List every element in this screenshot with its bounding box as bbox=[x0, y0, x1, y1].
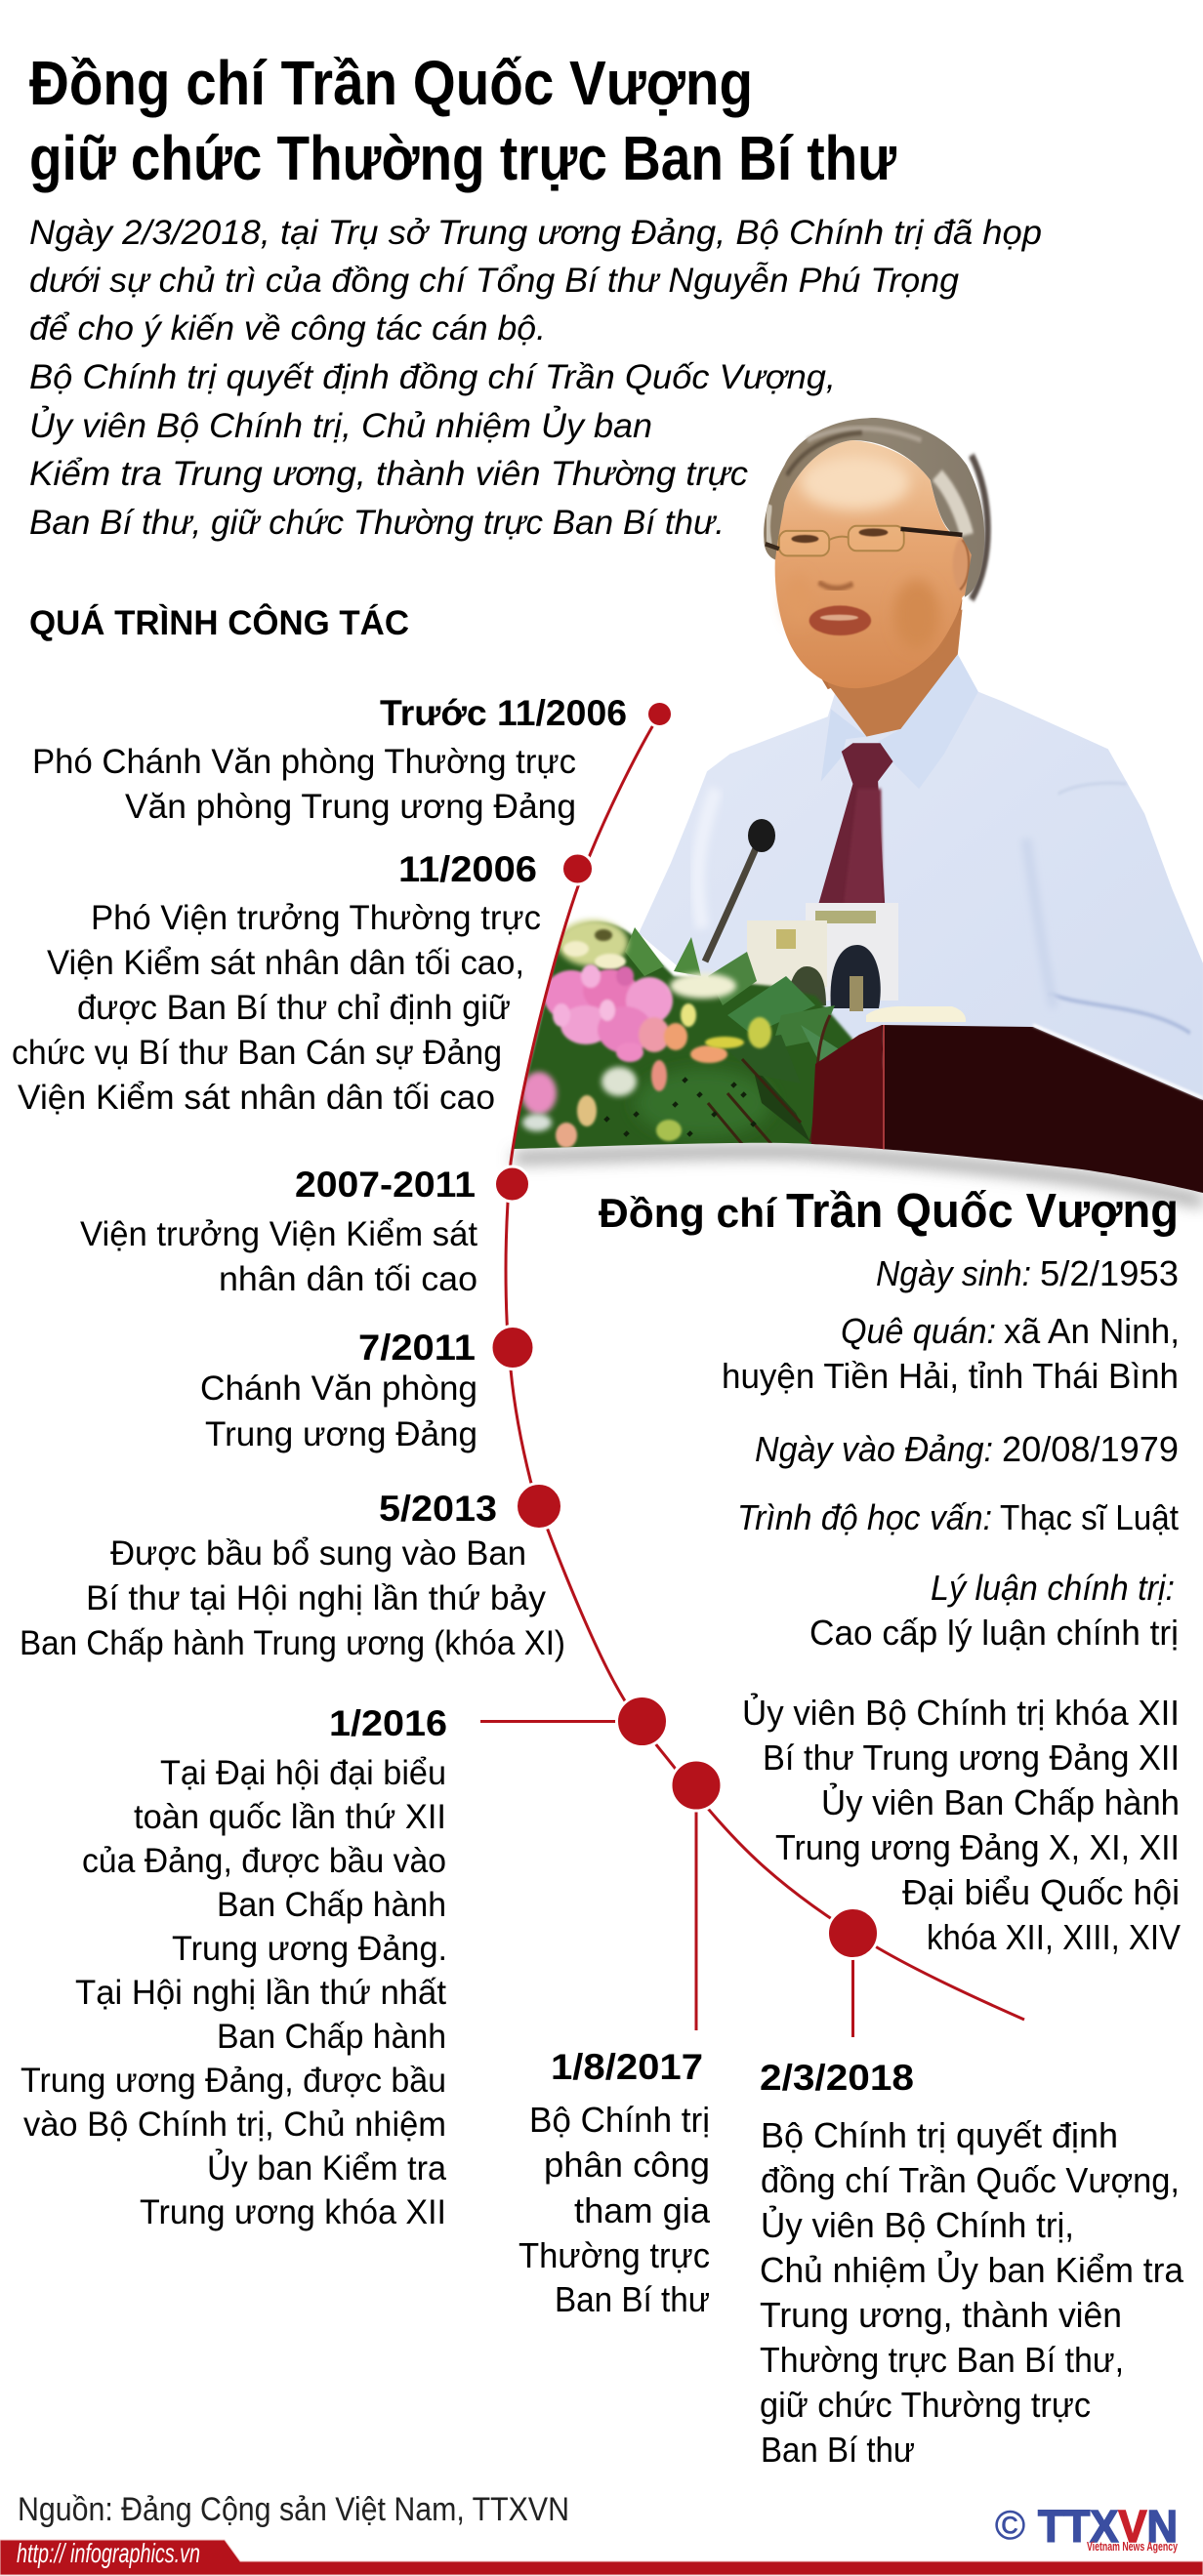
timeline entry: 1/2016: Trung ương Đảng, được bầu bbox=[21, 2062, 446, 2100]
profile details: Ngày vào Đảng: bbox=[755, 1429, 993, 1469]
profile positions bbox=[742, 1692, 1181, 1957]
timeline entry: 2/3/2018: Trung ương, thành viên bbox=[760, 2295, 1122, 2335]
pink orchids bbox=[544, 964, 673, 1062]
title bbox=[29, 48, 897, 193]
podium bbox=[810, 1006, 1203, 1210]
photo: portrait at the podium bbox=[508, 418, 1203, 1210]
timeline entry: 2007-2011 bbox=[80, 1165, 477, 1298]
source: Nguồn: Đảng Cộng sản Việt Nam, TTXVN bbox=[18, 2491, 569, 2528]
timeline entry: 11/2006: Viện Kiểm sát nhân dân tối cao, bbox=[47, 944, 524, 982]
timeline entry: 11/2006: 11/2006 bbox=[398, 849, 537, 889]
profile positions: khóa XII, XIII, XIV bbox=[927, 1917, 1181, 1957]
profile positions: Bí thư Trung ương Đảng XII bbox=[763, 1738, 1180, 1778]
timeline entry: 11/2006: được Ban Bí thư chỉ định giữ bbox=[77, 989, 511, 1027]
timeline entry: 7/2011: 7/2011 bbox=[358, 1328, 476, 1368]
standing microphone bbox=[705, 819, 775, 961]
timeline entry: Trước 11/2006: Văn phòng Trung ương Đảng bbox=[125, 788, 576, 826]
profile details bbox=[722, 1253, 1180, 1653]
timeline dots bbox=[491, 701, 879, 1958]
timeline entry: 7/2011: Trung ương Đảng bbox=[205, 1415, 477, 1453]
profile details: Cao cấp lý luận chính trị bbox=[809, 1613, 1179, 1653]
timeline entry: 2/3/2018: Chủ nhiệm Ủy ban Kiểm tra bbox=[760, 2249, 1184, 2290]
timeline entry: Trước 11/2006 bbox=[32, 693, 627, 826]
timeline entry: 1/8/2017: Ban Bí thư bbox=[555, 2279, 710, 2319]
intro text: Ủy viên Bộ Chính trị, Chủ nhiệm Ủy ban bbox=[29, 405, 652, 445]
timeline entry: 1/2016: vào Bộ Chính trị, Chủ nhiệm bbox=[23, 2106, 446, 2144]
timeline entry: 1/2016: Ban Chấp hành bbox=[217, 2018, 446, 2056]
profile details: Trình độ học vấn: bbox=[737, 1497, 992, 1537]
timeline entry: 5/2013: Ban Chấp hành Trung ương (khóa XI) bbox=[20, 1624, 565, 1662]
profile name heading: Đồng chí bbox=[599, 1190, 777, 1236]
timeline entry: 1/8/2017: 1/8/2017 bbox=[551, 2047, 703, 2087]
timeline entry: 1/2016: Trung ương Đảng. bbox=[172, 1930, 447, 1968]
timeline entry: 1/2016: 1/2016 bbox=[329, 1703, 447, 1743]
timeline entry: 1/2016: Tại Hội nghị lần thứ nhất bbox=[75, 1974, 446, 2012]
intro text: Kiểm tra Trung ương, thành viên Thường trực bbox=[29, 455, 749, 493]
timeline entry: 1/2016: toàn quốc lần thứ XII bbox=[134, 1798, 446, 1836]
section heading: QUÁ TRÌNH CÔNG TÁC bbox=[29, 603, 409, 642]
timeline entry: 5/2013 bbox=[20, 1489, 565, 1662]
timeline entry: 2/3/2018 bbox=[760, 2058, 1184, 2470]
profile details: huyện Tiền Hải, tỉnh Thái Bình bbox=[722, 1356, 1179, 1396]
flower arrangement bbox=[508, 920, 874, 1157]
timeline entry: Trước 11/2006: Phó Chánh Văn phòng Thường trực bbox=[32, 743, 576, 781]
profile positions: Ủy viên Ban Chấp hành bbox=[821, 1781, 1180, 1822]
intro text: Ngày 2/3/2018, tại Trụ sở Trung ương Đảng, Bộ Chính trị đã họp bbox=[29, 214, 1042, 252]
profile details: Lý luận chính trị: bbox=[931, 1568, 1175, 1608]
profile positions: Đại biểu Quốc hội bbox=[902, 1872, 1180, 1912]
profile details: 5/2/1953 bbox=[1040, 1253, 1179, 1293]
timeline entry: 2/3/2018: Thường trực Ban Bí thư, bbox=[760, 2340, 1124, 2380]
timeline curve bbox=[506, 715, 1024, 2020]
timeline entry: 1/2016: Ủy ban Kiểm tra bbox=[207, 2148, 447, 2188]
timeline entry: 1/2016: của Đảng, được bầu vào bbox=[82, 1842, 446, 1880]
timeline entry: 5/2013: Được bầu bổ sung vào Ban bbox=[110, 1534, 526, 1573]
profile details: xã An Ninh, bbox=[1004, 1311, 1180, 1351]
profile positions: Trung ương Đảng X, XI, XII bbox=[775, 1827, 1180, 1867]
timeline entry: 11/2006: Phó Viện trưởng Thường trực bbox=[91, 899, 541, 937]
logo: TTXVN: © bbox=[995, 2502, 1025, 2548]
intro text: Bộ Chính trị quyết định đồng chí Trần Quốc Vượng, bbox=[29, 358, 836, 396]
microphone cluster bbox=[747, 903, 898, 1011]
timeline entry: 2/3/2018: Ban Bí thư bbox=[761, 2430, 915, 2470]
title: Đồng chí Trần Quốc Vượng bbox=[29, 48, 753, 118]
timeline entry: 2/3/2018: Ủy viên Bộ Chính trị, bbox=[761, 2204, 1074, 2245]
timeline entry: 1/8/2017: phân công bbox=[544, 2145, 710, 2185]
timeline entry: 1/2016: Trung ương khóa XII bbox=[140, 2193, 446, 2231]
title: giữ chức Thường trực Ban Bí thư bbox=[29, 123, 897, 193]
timeline entry: 2/3/2018: Bộ Chính trị quyết định bbox=[761, 2115, 1118, 2155]
intro text bbox=[29, 214, 1042, 542]
intro text: dưới sự chủ trì của đồng chí Tổng Bí thư Nguyễn Phú Trọng bbox=[29, 262, 960, 300]
connector lines bbox=[480, 1722, 853, 2037]
timeline entry: 11/2006: chức vụ Bí thư Ban Cán sự Đảng bbox=[12, 1034, 502, 1072]
timeline entry: 1/2016: Ban Chấp hành bbox=[217, 1886, 446, 1924]
timeline entry: 2/3/2018: đồng chí Trần Quốc Vượng, bbox=[761, 2160, 1180, 2200]
profile name heading: Trần Quốc Vượng bbox=[786, 1185, 1179, 1238]
intro text: Ban Bí thư, giữ chức Thường trực Ban Bí thư. bbox=[29, 504, 725, 542]
profile details: 20/08/1979 bbox=[1002, 1429, 1179, 1469]
timeline entry: 5/2013: Bí thư tại Hội nghị lần thứ bảy bbox=[86, 1579, 547, 1617]
timeline entry: 11/2006 bbox=[12, 849, 541, 1117]
timeline entry: 1/8/2017 bbox=[519, 2047, 711, 2319]
profile name heading bbox=[599, 1185, 1179, 1238]
timeline entry: 1/8/2017: Thường trực bbox=[519, 2235, 710, 2275]
timeline entry: 1/8/2017: tham gia bbox=[574, 2190, 711, 2230]
timeline entry: 1/8/2017: Bộ Chính trị bbox=[529, 2100, 710, 2140]
profile details: Ngày sinh: bbox=[876, 1253, 1031, 1293]
timeline entry: 1/2016: Tại Đại hội đại biểu bbox=[160, 1754, 446, 1792]
profile positions: Ủy viên Bộ Chính trị khóa XII bbox=[742, 1692, 1180, 1733]
timeline entry: 7/2011 bbox=[200, 1328, 477, 1453]
footer url: http:// infographics.vn bbox=[17, 2538, 200, 2568]
timeline entry: 7/2011: Chánh Văn phòng bbox=[200, 1370, 477, 1408]
timeline entry: 5/2013: 5/2013 bbox=[379, 1489, 497, 1529]
profile details: Thạc sĩ Luật bbox=[1000, 1497, 1179, 1537]
timeline entry: 2007-2011: 2007-2011 bbox=[295, 1165, 476, 1205]
man bbox=[639, 418, 1203, 1127]
timeline entry: 2/3/2018: 2/3/2018 bbox=[760, 2058, 914, 2098]
timeline entry: 2007-2011: Viện trưởng Viện Kiểm sát bbox=[80, 1215, 477, 1253]
timeline entry: 2/3/2018: giữ chức Thường trực bbox=[760, 2385, 1091, 2425]
profile details: Quê quán: bbox=[841, 1311, 996, 1351]
logo: TTXVN: TTXVN bbox=[1038, 2501, 1178, 2552]
timeline entry: 2007-2011: nhân dân tối cao bbox=[219, 1260, 477, 1298]
intro text: để cho ý kiến về công tác cán bộ. bbox=[29, 309, 546, 348]
timeline entry: Trước 11/2006: Trước 11/2006 bbox=[380, 693, 627, 733]
timeline entry: 1/2016 bbox=[21, 1703, 447, 2231]
timeline entry: 11/2006: Viện Kiểm sát nhân dân tối cao bbox=[18, 1079, 495, 1117]
footer band bbox=[0, 2538, 1203, 2575]
